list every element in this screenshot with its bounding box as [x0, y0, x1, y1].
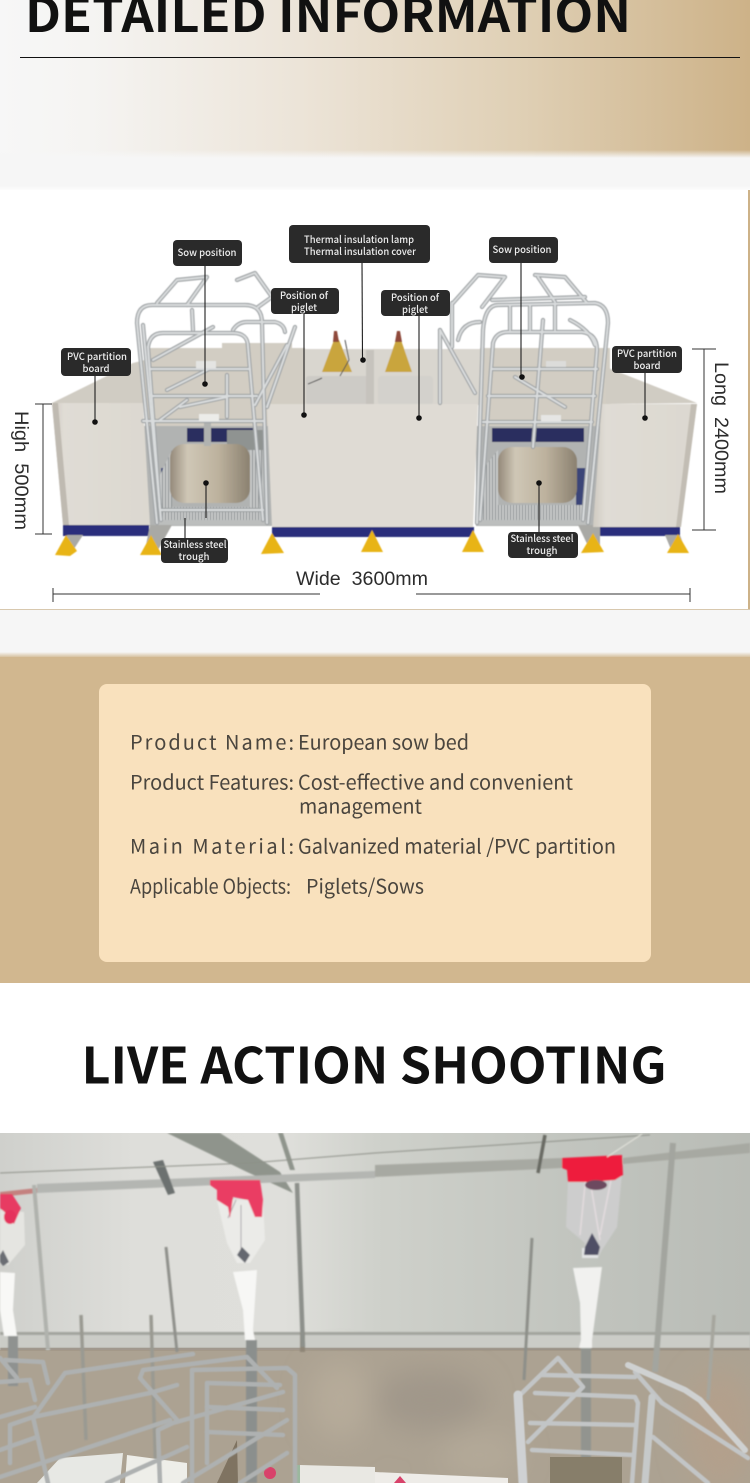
- label: position of piglet right: piglet: [402, 301, 428, 316]
- spec: applicable objects: [130, 870, 424, 900]
- dimension: wide 3600mm: Wide 3600mm: [296, 569, 428, 590]
- lamps: [322, 340, 352, 372]
- label: pvc partition board right: [612, 345, 682, 373]
- dimension: long 2400mm: [692, 349, 731, 530]
- spec: product name: [130, 726, 469, 756]
- dimension: high 500mm: [10, 404, 52, 534]
- label: stainless steel trough left: trough: [178, 548, 210, 563]
- label: thermal insulation: Thermal insulation cover: [304, 243, 417, 258]
- label: thermal insulation: [289, 225, 430, 263]
- label: stainless steel trough right: Stainless steel: [510, 530, 574, 545]
- heading: live action shooting: LIVE ACTION SHOOTING: [82, 1026, 666, 1098]
- feeder right: [566, 1173, 622, 1258]
- label: position of piglet left: piglet: [291, 299, 317, 314]
- label: pvc partition board left: [61, 348, 131, 376]
- background: top gradient band: [0, 0, 750, 191]
- dimension: long 2400mm: Long 2400mm: [710, 362, 731, 494]
- band: gray separator: [0, 610, 750, 654]
- spec: main material: Main Material:: [130, 830, 294, 860]
- panel: tan product details background: [0, 652, 750, 983]
- label: position of piglet right: Position of: [391, 289, 439, 304]
- label: position of piglet right: [381, 289, 450, 316]
- dimension: high 500mm: High 500mm: [10, 411, 31, 530]
- spec: product features: Product Features:: [130, 766, 294, 796]
- card: product specifications: [99, 684, 651, 962]
- dimension: wide 3600mm: [53, 569, 690, 602]
- grates: [160, 507, 264, 521]
- blue skirts: [63, 525, 149, 536]
- wall and concrete: [0, 1133, 750, 1351]
- label: stainless steel trough right: [508, 530, 578, 558]
- feeder centre left: [217, 1200, 265, 1263]
- pens and openings in photo: [37, 1453, 123, 1483]
- label: sow position right: Sow position: [492, 241, 552, 256]
- label: sow position right: [489, 237, 558, 263]
- spec: product name: European sow bed: [298, 726, 469, 756]
- diagram illustration: farrowing crate: [52, 273, 697, 556]
- spec: product features: Cost-effective and convenient: [298, 766, 573, 796]
- yellow feet: [55, 530, 689, 556]
- pipes: [246, 1340, 257, 1483]
- spec: product name: Product Name:: [130, 726, 294, 756]
- label: pvc partition board left: board: [82, 360, 110, 375]
- crates in photo: [0, 1354, 748, 1483]
- legs: [62, 535, 83, 552]
- ceiling beams: [167, 1133, 293, 1193]
- floor interior: [143, 426, 273, 526]
- title underline: [20, 57, 740, 58]
- leader lines and dots: [92, 262, 648, 538]
- label: thermal insulation: Thermal insulation lamp: [304, 231, 414, 246]
- label: sow position left: Sow position: [178, 244, 236, 259]
- heat lamp boxes: [306, 376, 368, 405]
- front panels: [52, 403, 150, 525]
- spec: main material: Galvanized material /PVC partition: [298, 830, 616, 860]
- label: stainless steel trough left: [161, 536, 228, 563]
- label: sow position left: [173, 240, 242, 266]
- label: position of piglet left: Position of: [280, 287, 328, 302]
- label: pvc partition board left: PVC partition: [67, 348, 127, 363]
- spec: product features: management: [299, 790, 422, 820]
- panel: product diagram: [0, 190, 750, 610]
- spec: applicable objects: Applicable Objects:: [130, 870, 291, 900]
- label: stainless steel trough right: trough: [526, 542, 558, 557]
- spec: applicable objects: Piglets/Sows: [306, 870, 424, 900]
- spec: product features: [130, 766, 573, 820]
- spec: main material: [130, 830, 616, 860]
- label: pvc partition board right: PVC partition: [617, 345, 677, 360]
- photo: farm interior with feeders and crates: [0, 1133, 750, 1483]
- troughs: [170, 444, 250, 503]
- label: stainless steel trough left: Stainless steel: [164, 536, 227, 551]
- columns and rods: [297, 1183, 303, 1347]
- label: position of piglet left: [271, 287, 339, 314]
- feeder far left: [0, 1210, 25, 1265]
- side and back walls: [52, 360, 145, 404]
- label: pvc partition board right: board: [634, 357, 660, 372]
- crate pipes: base and highlight: [137, 273, 608, 523]
